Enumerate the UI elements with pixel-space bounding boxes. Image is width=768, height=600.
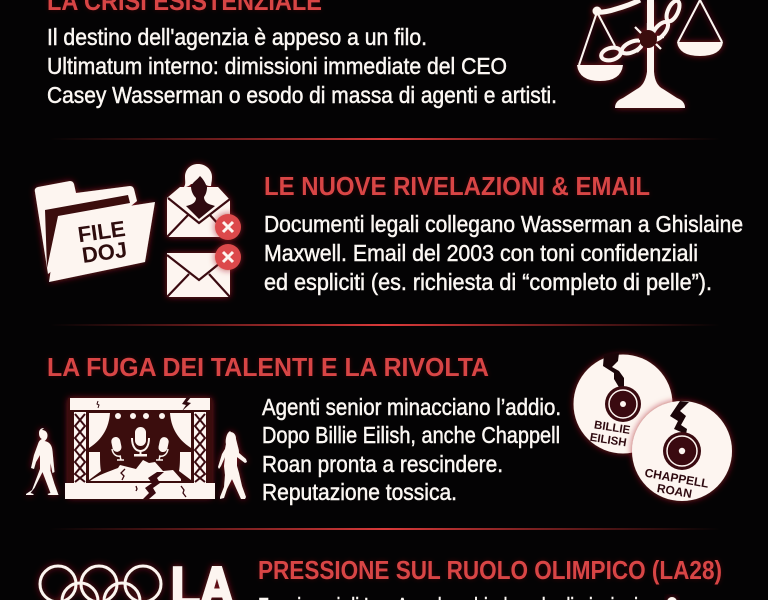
icon: broken record Billie Eilish: EILISH — [589, 432, 627, 449]
text block: crisis description: Il destino dell'agenzia è appeso a un filo. — [47, 24, 427, 50]
text block: talent description: Roan pronta a rescindere. — [262, 451, 503, 477]
text block: documents description: ed espliciti (es. richiesta di “completo di pelle”). — [264, 269, 712, 295]
icon: scales with broken chain — [577, 0, 723, 108]
icon: broken record Billie Eilish: BILLIE — [593, 419, 631, 437]
icon: envelope with portrait — [167, 164, 230, 237]
icon: broken record Chappell Roan: ROAN — [656, 481, 693, 501]
icon: broken record Chappell Roan: CHAPPELL — [644, 466, 710, 491]
icon: woman walking away — [218, 431, 247, 499]
icon: envelope — [167, 253, 230, 297]
text block: crisis description — [47, 24, 557, 108]
heading: la fuga dei talenti: LA FUGA DEI TALENTI E LA RIVOLTA — [47, 352, 489, 382]
divider — [50, 138, 720, 140]
text block: talent description: Agenti senior minacciano l’addio. — [262, 394, 561, 420]
icon: broken record Chappell Roan — [632, 401, 732, 504]
icon: partial white glyph — [667, 597, 677, 600]
section 2: le nuove rivelazioni — [35, 164, 743, 297]
text block: talent description: Dopo Billie Eilish, anche Chappell — [262, 422, 560, 448]
icon: man walking away — [26, 428, 58, 495]
icon: DOJ file folder — [35, 181, 155, 282]
divider — [50, 528, 720, 530]
section 4: pressione olimpica — [40, 555, 722, 600]
section 1: la crisi esistenziale — [47, 0, 723, 108]
icon: red x badge bottom — [215, 244, 241, 270]
text block: talent description: Reputazione tossica. — [262, 479, 457, 505]
text block: crisis description: Casey Wasserman o esodo di massa di agenti e artisti. — [47, 82, 557, 108]
divider — [50, 324, 720, 326]
icon: broken stage — [65, 397, 215, 499]
heading: le nuove rivelazioni: LE NUOVE RIVELAZIONI & EMAIL — [264, 171, 650, 201]
label: FILE DOJ: DOJ — [80, 237, 129, 268]
label: FILE DOJ — [76, 216, 130, 268]
text block: documents description: Maxwell. Email del 2003 con toni confidenziali — [264, 240, 698, 266]
text block: documents description — [264, 211, 743, 295]
label: FILE DOJ: FILE — [76, 216, 127, 247]
section 3: la fuga dei talenti — [26, 352, 732, 505]
text block: crisis description: Ultimatum interno: dimissioni immediate del CEO — [47, 53, 507, 79]
icon: broken record Billie Eilish — [574, 353, 672, 454]
text block: talent description — [262, 394, 561, 505]
icon: red x badge top — [215, 214, 241, 240]
icon: olympic rings — [40, 566, 161, 600]
